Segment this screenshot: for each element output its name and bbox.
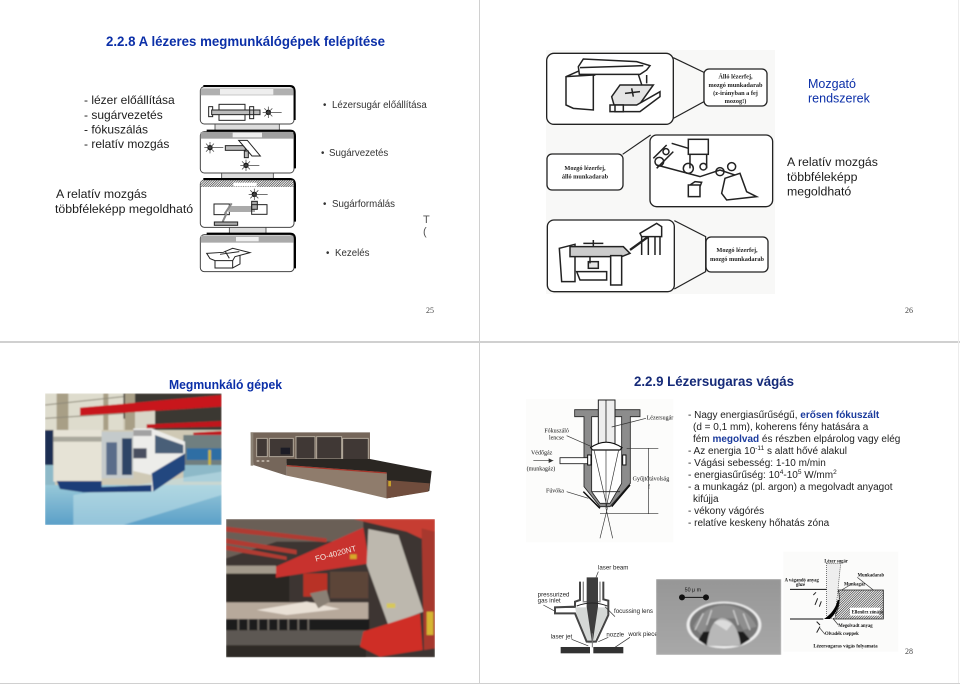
text block: laser cutting properties: - Nagy energiasűrűségű, erősen fókuszált [688, 410, 880, 421]
text block: laser cutting properties: - a munkagáz (pl. argon) a megolvadt anyagot [688, 482, 893, 493]
panel: robot arm [623, 135, 773, 247]
labels: machine stages: • [326, 248, 329, 259]
heading: machining equipment: Megmunkáló gépek [169, 378, 282, 392]
text block: relative motion note [55, 187, 193, 216]
callout: fixed head moving workpiece: Álló lézerfej, [718, 72, 753, 80]
diagram: focusing head (Hungarian): Védőgáz [531, 450, 553, 456]
photo: red Amada laser [226, 519, 435, 657]
diagram: focusing head (Hungarian) [526, 399, 673, 542]
diagram: laser cutting process: Munkadarab [858, 573, 884, 578]
diagram: focusing head (Hungarian): Gyűjtőtávolság [633, 477, 669, 483]
labels: machine stages: Kezelés [335, 248, 370, 259]
diagram: laser cutting process: A vágandó anyag [785, 579, 819, 584]
heading: motion systems: Mozgató [808, 77, 856, 91]
diagram: laser cutting process: Olvadék cseppek [825, 632, 859, 637]
panel: fixed head moving workpiece [547, 53, 704, 124]
diagram: laser jet nozzle (English): laser beam [598, 564, 628, 571]
text block: laser cutting properties: 4 [780, 469, 784, 476]
text block: relative motion: többféleképp [787, 170, 858, 184]
text block: laser cutting properties: fém megolvad és részben elpárolog vagy elég [693, 434, 900, 445]
text block: relative motion: megoldható [787, 184, 851, 198]
labels: machine stages: Lézersugár előállítása [332, 100, 427, 111]
labels: machine stages: Sugárformálás [332, 199, 395, 210]
panel: moving head moving workpiece [547, 220, 706, 292]
diagram: laser jet nozzle (English): nozzle [606, 631, 625, 638]
text block: process list: - fókuszálás [84, 122, 148, 136]
labels: machine stages: Sugárvezetés [329, 148, 388, 159]
diagram: laser cutting process: Lézersugaras vágás folyamata [813, 645, 878, 650]
page number: 26: 26 [905, 306, 913, 315]
title: 2.2.8: 2.2.8 A lézeres megmunkálógépek felépítése [106, 33, 385, 49]
diagram: focusing head (Hungarian): Fókuszáló [544, 429, 569, 435]
labels: machine stages: • [323, 100, 326, 111]
diagram: laser cutting process: Lézer sugár [824, 559, 848, 564]
text block: relative motion: A relatív mozgás [787, 155, 878, 169]
photo: blue laser cutter in hall [45, 393, 222, 525]
callout: moving head and workpiece [706, 237, 768, 272]
callout: moving head fixed workpiece: Mozgó lézerfej, [564, 165, 606, 172]
text block: process list: - lézer előállítása [84, 93, 175, 107]
diagram: laser cutting process: Megolvadt anyag [838, 624, 873, 629]
callout: fixed head moving workpiece: (z-irányban a fej [713, 90, 758, 97]
heading: motion systems [808, 77, 871, 106]
text block: process list: - relatív mozgás [84, 137, 169, 151]
text block: laser cutting properties: W/mm [801, 470, 833, 481]
text block: relative motion note: többféleképp megoldható [55, 202, 193, 216]
clipped text fragment: ( [423, 226, 427, 238]
title: 2.2.9: 2.2.9 Lézersugaras vágás [634, 373, 794, 389]
text block: process list: - sugárvezetés [84, 108, 163, 122]
diagram: laser jet nozzle (English): laser jet [551, 634, 573, 641]
text block: laser cutting properties: 2 [833, 469, 837, 476]
diagram: focusing head (Hungarian): f [648, 483, 650, 490]
diagram: laser cutting process: Munkagáz [844, 583, 865, 588]
callout: fixed head moving workpiece: mozgó munkadarab [708, 82, 763, 89]
text block: relative motion [787, 155, 878, 198]
callout: moving head and workpiece: Mozgó lézerfej, [716, 247, 758, 254]
labels: machine stages: • [321, 148, 324, 159]
text block: laser cutting properties: - energiasűrűség: 10 [688, 470, 780, 481]
diagram: laser jet nozzle (English) [538, 564, 658, 653]
diagram: laser cutting process: Ellenőrz zónája [852, 610, 883, 615]
page number: 25: 25 [426, 306, 434, 315]
callout: fixed head moving workpiece: mozog!) [725, 98, 746, 105]
photo: brown laser cutter [251, 432, 432, 498]
text block: laser cutting properties: -11 [755, 445, 765, 452]
photo: SEM micrograph of cut hole [656, 579, 781, 655]
callout: moving head fixed workpiece [547, 154, 623, 190]
photo: SEM micrograph of cut hole: 50 μ m [685, 588, 702, 594]
diagram: focusing head (Hungarian): (munkagáz) [527, 465, 555, 472]
labels: machine stages [321, 100, 427, 259]
page number: 28: 28 [905, 647, 913, 656]
diagram: laser jet nozzle (English): work piece [627, 631, 658, 638]
callout: moving head and workpiece: mozgó munkadarab [710, 256, 765, 263]
text block: laser cutting properties: 5 [798, 469, 802, 476]
text block: laser cutting properties: -10 [783, 470, 798, 481]
callout: fixed head moving workpiece [704, 69, 767, 106]
text block: relative motion note: A relatív mozgás [56, 187, 147, 201]
diagram: laser jet nozzle (English): gas inlet [538, 598, 561, 605]
text block: laser cutting properties: - vékony vágórés [688, 506, 764, 517]
text block: laser cutting properties: (d = 0,1 mm), koherens fény hatására a [693, 422, 869, 433]
text block: laser cutting properties: - Az energia 10 [688, 446, 755, 457]
heading: motion systems: rendszerek [808, 92, 871, 106]
callout: moving head fixed workpiece: álló munkadarab [562, 174, 609, 180]
diagram: laser cutting process [783, 552, 898, 652]
clipped text fragment [423, 214, 430, 238]
text block: laser cutting properties: kifújja [693, 494, 719, 505]
diagram: laser cutting process: ghzé [796, 583, 805, 588]
labels: machine stages: • [323, 199, 326, 210]
diagram: laser machine stages [200, 86, 295, 272]
text block: laser cutting properties [688, 410, 900, 529]
text block: laser cutting properties: s alatt hővé alakul [764, 446, 847, 457]
diagram: focusing head (Hungarian): lencse [549, 436, 564, 442]
diagram: focusing head (Hungarian): Fúvóka [546, 489, 564, 495]
diagram: focusing head (Hungarian): Lézersugár [647, 415, 673, 421]
diagram: laser jet nozzle (English): focussing lens [614, 608, 653, 615]
text block: laser cutting properties: - relatíve keskeny hőhatás zóna [688, 518, 830, 529]
photo: red Amada laser: FO-4020NT [314, 544, 357, 564]
text block: process list [84, 93, 175, 151]
panel: motion systems drawing [546, 50, 775, 294]
text block: laser cutting properties: - Vágási sebesség: 1-10 m/min [688, 458, 826, 469]
clipped text fragment: T [423, 214, 430, 226]
diagram: laser jet nozzle (English): pressurized [538, 592, 570, 599]
